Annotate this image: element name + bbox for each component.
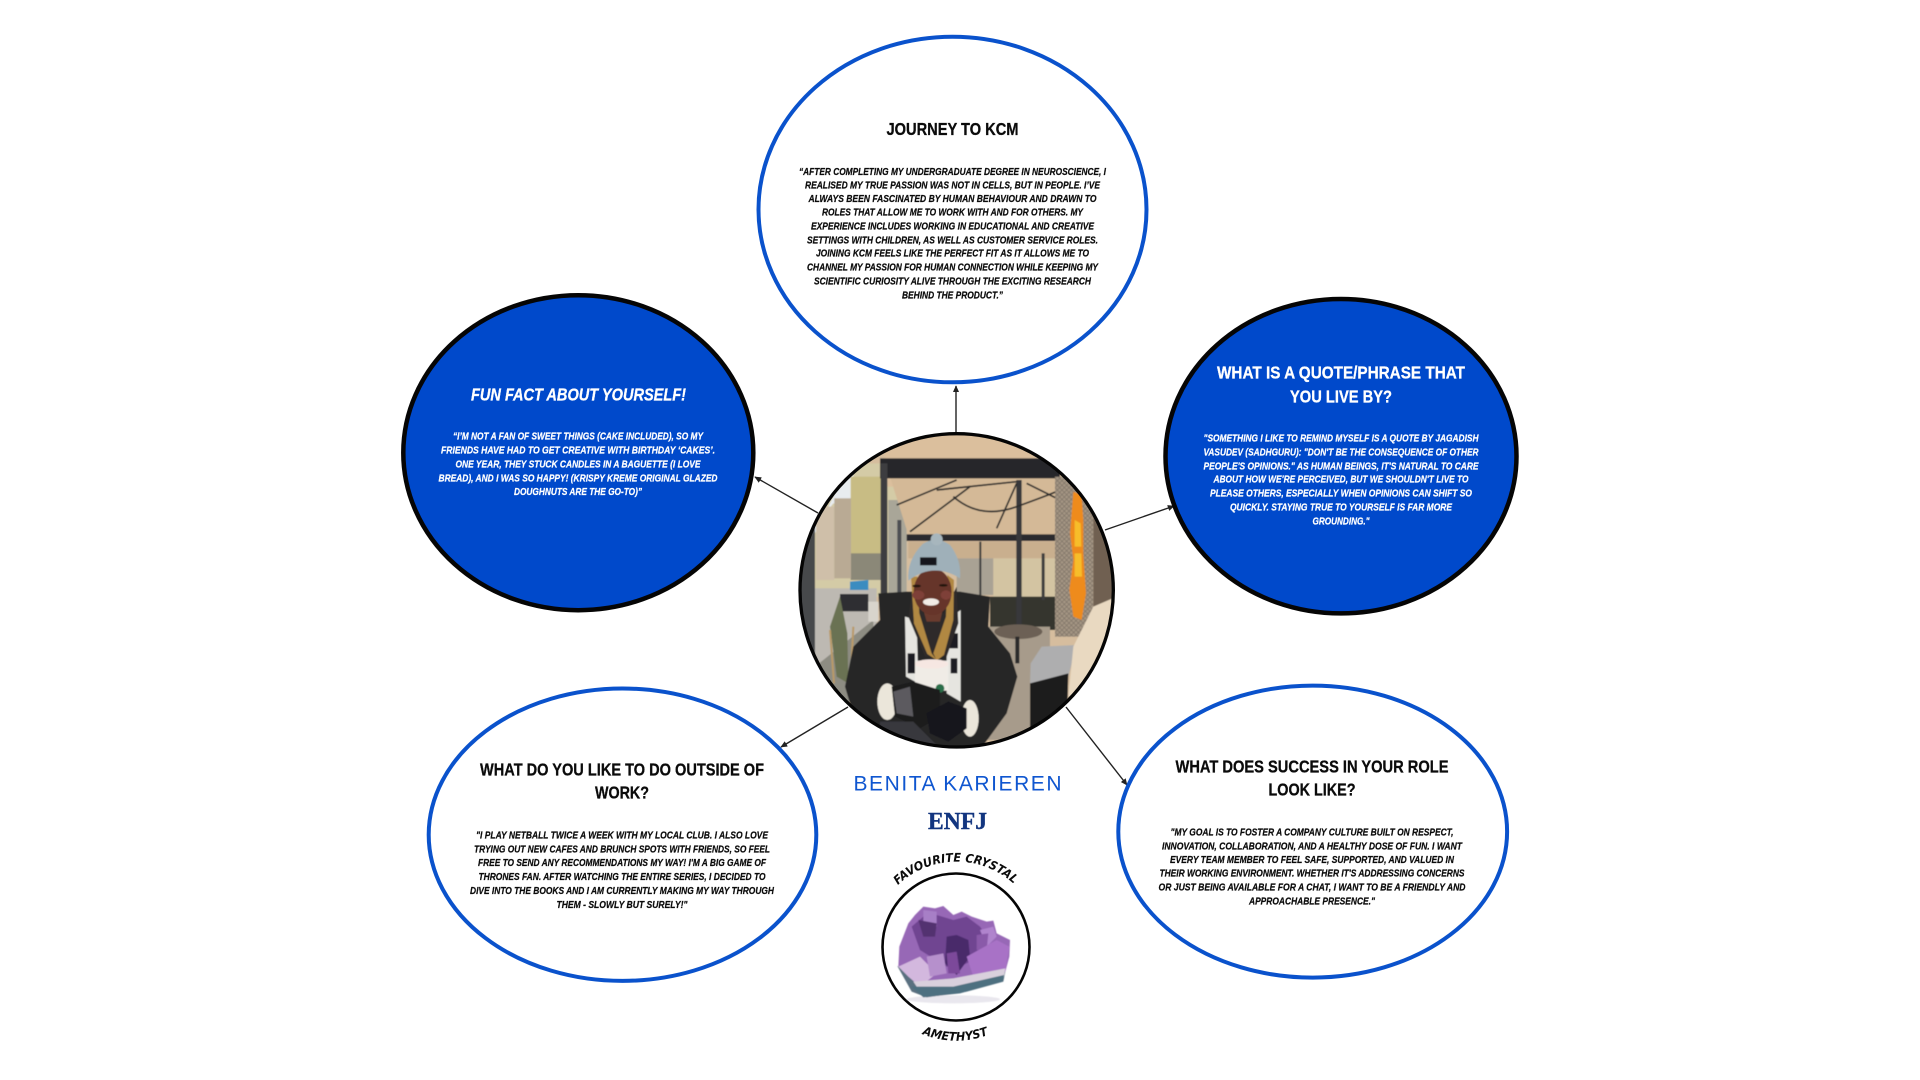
text block: fun fact answer: BREAD), AND I WAS SO HAPPY! (KRISPY KREME ORIGINAL GLAZED — [438, 473, 718, 484]
personality type: ENFJ: ENFJ — [928, 809, 987, 835]
text block: success answer: OR JUST BEING AVAILABLE FOR A CHAT, I WANT TO BE A FRIENDLY AND — [1158, 883, 1466, 894]
heading: success in role — [1176, 757, 1448, 800]
text block: outside of work answer: "I PLAY NETBALL TWICE A WEEK WITH MY LOCAL CLUB. I ALSO LOVE — [476, 831, 768, 842]
text block: success answer: THEIR WORKING ENVIRONMENT. WHETHER IT'S ADDRESSING CONCERNS — [1160, 869, 1465, 880]
text block: journey answer: ALWAYS BEEN FASCINATED BY HUMAN BEHAVIOUR AND DRAWN TO — [808, 194, 1097, 205]
arrow: photo to quote panel — [1105, 506, 1174, 530]
text block: outside of work answer: TRYING OUT NEW CAFES AND BRUNCH SPOTS WITH FRIENDS, SO FEEL — [474, 845, 770, 856]
text block: journey answer: CHANNEL MY PASSION FOR HUMAN CONNECTION WHILE KEEPING MY — [807, 263, 1099, 274]
panel: outside of work — [429, 688, 816, 981]
person — [845, 592, 1017, 750]
framing posts and lights — [881, 463, 887, 593]
text block: journey answer: EXPERIENCE INCLUDES WORKING IN EDUCATIONAL AND CREATIVE — [811, 222, 1094, 233]
arrow: photo to success panel — [1066, 707, 1127, 785]
text block: fun fact answer: DOUGHNUTS ARE THE GO-TO)” — [514, 487, 642, 498]
text block: quote answer: QUICKLY. STAYING TRUE TO YOURSELF IS FAR MORE — [1230, 503, 1452, 514]
panel: quote or phrase — [1166, 299, 1516, 613]
text block: journey answer: SCIENTIFIC CURIOSITY ALIVE THROUGH THE EXCITING RESEARCH — [814, 277, 1092, 288]
heading: quote or phrase — [1217, 362, 1465, 407]
text block: quote answer: ABOUT HOW WE'RE PERCEIVED, BUT WE SHOULDN'T LIVE TO — [1213, 475, 1469, 486]
text block: outside of work answer: THEM - SLOWLY BUT SURELY!" — [556, 900, 688, 911]
text block: journey answer: JOINING KCM FEELS LIKE THE PERFECT FIT AS IT ALLOWS ME TO — [816, 249, 1089, 260]
text block: quote answer: GROUNDING." — [1312, 517, 1370, 528]
text block: success answer — [1158, 828, 1466, 908]
curved label: favourite crystal: FAVOURITE CRYSTAL — [894, 852, 1017, 885]
back windows and wall — [957, 558, 993, 595]
text block: quote answer: "SOMETHING I LIKE TO REMIND MYSELF IS A QUOTE BY JAGADISH — [1204, 434, 1479, 445]
text block: journey answer: ROLES THAT ALLOW ME TO WORK WITH AND FOR OTHERS. MY — [822, 208, 1084, 219]
heading: success in role: LOOK LIKE? — [1268, 780, 1356, 800]
panel: success in role — [1118, 686, 1507, 978]
text block: journey answer: “AFTER COMPLETING MY UNDERGRADUATE DEGREE IN NEUROSCIENCE, I — [799, 167, 1106, 178]
canopy — [888, 478, 892, 486]
text block: success answer: EVERY TEAM MEMBER TO FEEL SAFE, SUPPORTED, AND VALUED IN — [1170, 855, 1455, 866]
curved label: amethyst: AMETHYST — [921, 1026, 987, 1041]
text block: success answer: INNOVATION, COLLABORATION, AND A HEALTHY DOSE OF FUN. I WANT — [1162, 842, 1463, 853]
arrow: photo to journey panel — [955, 386, 957, 434]
text block: quote answer — [1204, 434, 1479, 528]
text block: success answer: APPROACHABLE PRESENCE." — [1248, 897, 1375, 908]
text block: fun fact answer: “I’M NOT A FAN OF SWEET THINGS (CAKE INCLUDED), SO MY — [453, 431, 704, 442]
text block: fun fact answer: ONE YEAR, THEY STUCK CANDLES IN A BAGUETTE (I LOVE — [456, 459, 701, 470]
heading: quote or phrase: YOU LIVE BY? — [1290, 387, 1392, 407]
text block: journey answer: REALISED MY TRUE PASSION WAS NOT IN CELLS, BUT IN PEOPLE. I’VE — [805, 181, 1100, 192]
text block: quote answer: PLEASE OTHERS, ESPECIALLY WHEN OPINIONS CAN SHIFT SO — [1210, 489, 1472, 500]
heading: quote or phrase: WHAT IS A QUOTE/PHRASE THAT — [1217, 362, 1465, 382]
arrow: photo to fun fact panel — [755, 477, 818, 513]
patio heater — [1055, 477, 1093, 637]
arrow: photo to outside work panel — [781, 707, 848, 747]
panel: journey to KCM — [758, 37, 1146, 382]
street side — [815, 464, 897, 596]
text block: outside of work answer: DIVE INTO THE BOOKS AND I AM CURRENTLY MAKING MY WAY THROUGH — [470, 886, 775, 897]
text block: journey answer: BEHIND THE PRODUCT.” — [902, 291, 1003, 302]
panel: fun fact — [403, 295, 753, 610]
heading: journey to KCM: JOURNEY TO KCM — [886, 119, 1018, 139]
text block: journey answer: SETTINGS WITH CHILDREN, AS WELL AS CUSTOMER SERVICE ROLES. — [807, 236, 1098, 247]
text block: quote answer: VASUDEV (SADHGURU): "DON'T BE THE CONSEQUENCE OF OTHER — [1204, 448, 1479, 459]
text block: fun fact answer: FRIENDS HAVE HAD TO GET CREATIVE WITH BIRTHDAY ‘CAKES’. — [441, 445, 715, 456]
heading: outside of work — [480, 760, 764, 803]
heading: success in role: WHAT DOES SUCCESS IN YOUR ROLE — [1176, 757, 1448, 777]
text block: journey answer — [799, 167, 1106, 302]
text block: fun fact answer — [438, 431, 718, 498]
heading: fun fact: FUN FACT ABOUT YOURSELF! — [471, 385, 686, 405]
heading: outside of work: WHAT DO YOU LIKE TO DO OUTSIDE OF — [480, 760, 764, 780]
portrait photo — [797, 430, 1117, 753]
text block: quote answer: PEOPLE'S OPINIONS." AS HUMAN BEINGS, IT'S NATURAL TO CARE — [1204, 462, 1479, 473]
text block: success answer: "MY GOAL IS TO FOSTER A COMPANY CULTURE BUILT ON RESPECT, — [1170, 828, 1454, 839]
text block: outside of work answer: FREE TO SEND ANY RECOMMENDATIONS MY WAY! I'M A BIG GAME OF — [478, 858, 767, 869]
text block: outside of work answer: THRONES FAN. AFTER WATCHING THE ENTIRE SERIES, I DECIDED TO — [478, 872, 766, 883]
icon: amethyst crystal in circle — [882, 874, 1030, 1020]
text block: outside of work answer — [470, 831, 775, 911]
heading: outside of work: WORK? — [595, 783, 649, 803]
name: Benita Karieren: BENITA KARIEREN — [854, 773, 1062, 796]
